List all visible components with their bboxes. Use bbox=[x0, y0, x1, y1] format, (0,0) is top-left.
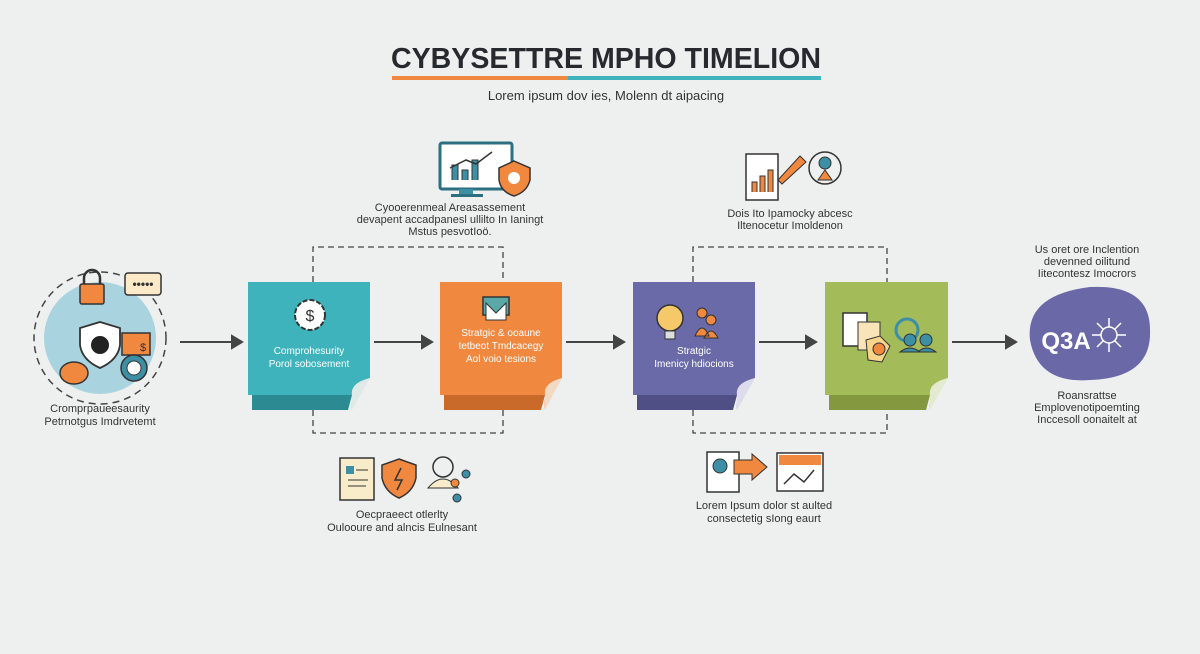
icon: chart and person bbox=[746, 152, 841, 200]
subtitle: Lorem ipsum dov ies, Molenn dt aipacing bbox=[488, 88, 724, 103]
icon: person bbox=[60, 362, 88, 384]
title: CYBYSETTRE MPHO TIMELION bbox=[391, 43, 821, 75]
text: end note bottom: Inccesoll oonaitelt at bbox=[1037, 414, 1137, 426]
text: end note bottom: Roansrattse bbox=[1057, 390, 1117, 402]
text: start label: Cromprpaueesaurity bbox=[50, 403, 150, 415]
icon: monitor and shield bbox=[440, 143, 530, 197]
panel: start circle bbox=[34, 270, 166, 404]
text: end note top: Iitecontesz Imocrors bbox=[1038, 268, 1137, 280]
panel: orange card: Stratgic & ooaune bbox=[461, 328, 541, 339]
panel: purple card: Imenicy hdiocions bbox=[654, 359, 734, 370]
icon: network bbox=[1092, 318, 1126, 352]
icon: chat: ••••• bbox=[132, 277, 154, 291]
text: bottom-left note: Oulooure and alncis Eulnesant bbox=[327, 522, 477, 534]
icon: documents and headset bbox=[843, 313, 936, 362]
text: top-right note: Iltenocetur Imoldenon bbox=[737, 220, 843, 232]
icon: shield bbox=[80, 322, 120, 368]
arrows bbox=[180, 336, 1016, 348]
dashed brackets bbox=[313, 247, 887, 433]
icon: people bbox=[695, 308, 718, 338]
text: top-left note: Mstus pesvotIoö. bbox=[408, 226, 492, 238]
text: bottom-left note: Oecpraeect otlerlty bbox=[356, 509, 449, 521]
text: start label: Petrnotgus Imdrvetemt bbox=[44, 416, 156, 428]
panel: Q3A blob bbox=[1030, 287, 1150, 380]
panel: orange card bbox=[440, 282, 562, 410]
text: top-right note: Dois Ito Ipamocky abcesc bbox=[727, 208, 853, 220]
text: bottom-right note: Lorem Ipsum dolor st aulted bbox=[696, 500, 832, 512]
text: end note top: Us oret ore Inclention bbox=[1035, 244, 1139, 256]
panel: teal card: Porol sobosement bbox=[269, 359, 350, 370]
text: top-left note: Cyooerenmeal Areasassement bbox=[375, 202, 525, 214]
icon: lightbulb bbox=[657, 305, 683, 339]
text: top-left note: devapent accadpanesl ullilto In Ianingt bbox=[357, 214, 543, 226]
text: bottom-right note: consectetig sIong eaurt bbox=[707, 513, 821, 525]
panel: Q3A blob: Q3A bbox=[1041, 328, 1091, 355]
text: end note top: devenned oilitund bbox=[1044, 256, 1130, 268]
panel: orange card: tetbeot Tmdcacegy bbox=[459, 341, 543, 352]
panel: purple card: Stratgic bbox=[677, 346, 711, 357]
icon: lock bbox=[80, 270, 104, 304]
panel: purple card bbox=[633, 282, 755, 410]
panel: green card bbox=[825, 282, 948, 410]
icon: envelope bbox=[483, 297, 509, 320]
icon: report arrow chart bbox=[707, 452, 823, 492]
icon: clipboard shield person bbox=[340, 457, 470, 502]
icon: calendar: $ bbox=[140, 342, 146, 354]
icon: gear bbox=[121, 355, 147, 381]
panel: teal card bbox=[248, 282, 370, 410]
panel: teal card: Comprohesurity bbox=[274, 346, 344, 357]
icon: gear dollar: $ bbox=[306, 308, 315, 325]
panel: orange card: Aol voio tesions bbox=[466, 354, 536, 365]
text: end note bottom: Emplovenotipoemting bbox=[1034, 402, 1140, 414]
